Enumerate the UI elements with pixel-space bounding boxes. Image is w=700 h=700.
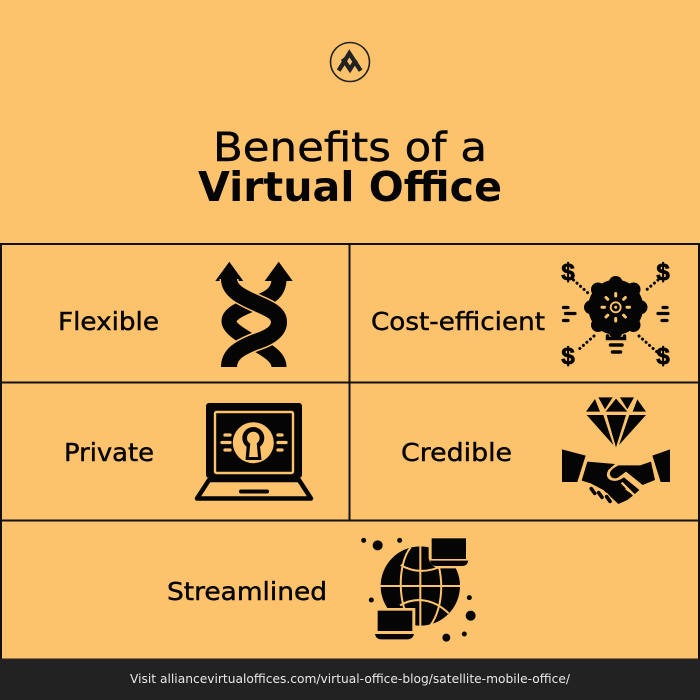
grid table: [0, 244, 700, 659]
footer bar: [0, 658, 700, 700]
title: [198, 125, 502, 211]
icon: diamond and handshake: [562, 397, 670, 504]
title: Benefits of a: [213, 125, 487, 171]
icon: gear bulb with dollars: $: [561, 259, 575, 286]
icon: globe with laptops: [361, 537, 476, 643]
label: Private: Private: [64, 438, 154, 467]
label: Streamlined: Streamlined: [167, 577, 327, 606]
icon: laptop with keyhole: [197, 403, 311, 498]
footer bar: Visit alliancevirtualoffices.com/virtual-office-blog/satellite-mobile-office/: [130, 672, 571, 686]
icon: crossing arrows: [215, 262, 293, 367]
label: Credible: Credible: [401, 438, 512, 467]
label: Cost-efficient: Cost-efficient: [371, 307, 545, 336]
icon: gear bulb with dollars: $: [656, 343, 670, 370]
gear: [584, 276, 648, 338]
icon: gear bulb with dollars: [561, 259, 670, 370]
icon: gear bulb with dollars: $: [656, 259, 670, 286]
label: Flexible: Flexible: [58, 307, 159, 336]
icon: gear bulb with dollars: $: [561, 343, 575, 370]
logo: [330, 42, 370, 82]
title: Virtual Office: [198, 163, 502, 211]
